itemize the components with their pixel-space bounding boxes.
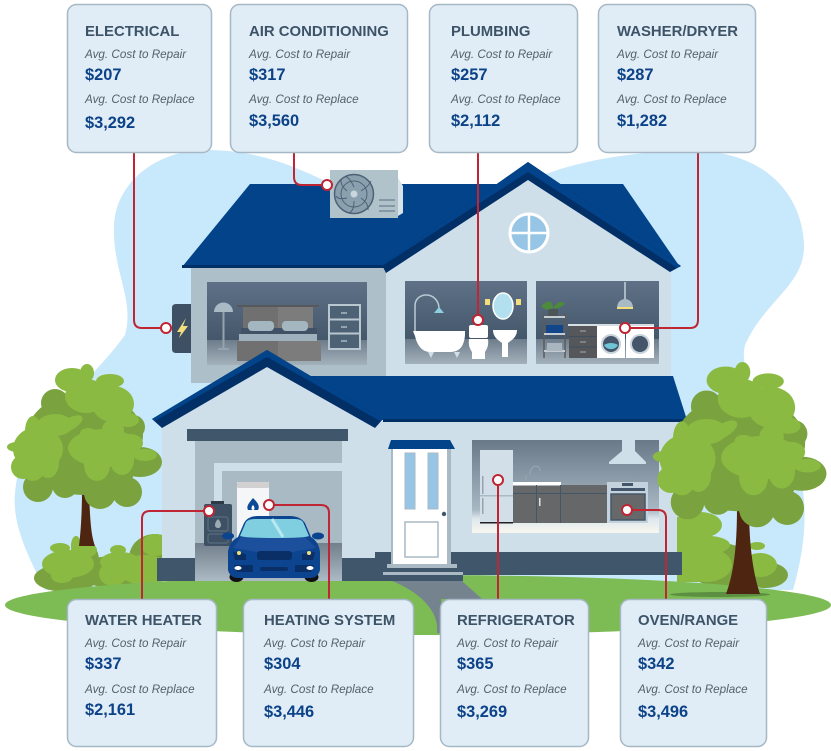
card: oven/range: Avg. Cost to Repair <box>637 637 740 650</box>
connector: air conditioning <box>294 152 332 190</box>
connector: oven/range <box>622 505 666 599</box>
garage <box>187 429 348 582</box>
back roof <box>182 184 680 268</box>
card: oven/range <box>620 600 766 746</box>
lower wall <box>162 422 677 558</box>
card: washer/dryer: Avg. Cost to Replace <box>616 93 727 106</box>
steps <box>383 564 463 581</box>
card: electrical: Avg. Cost to Replace <box>84 93 195 106</box>
card: electrical: $207 <box>85 66 121 84</box>
laundry room <box>536 281 659 364</box>
card: heating system: HEATING SYSTEM <box>264 613 395 629</box>
attic round window <box>510 214 548 252</box>
counter and drawers <box>568 324 654 358</box>
card: washer/dryer: $287 <box>617 66 653 84</box>
sink <box>493 330 517 357</box>
connector: plumbing <box>473 152 483 325</box>
right bushes <box>677 512 788 588</box>
upper gable wall <box>386 180 671 385</box>
range hood <box>609 440 646 464</box>
washer <box>597 326 625 358</box>
front door <box>383 440 463 581</box>
bathroom <box>405 281 527 364</box>
card: water heater <box>68 600 216 746</box>
water heater unit <box>204 501 232 546</box>
card: air conditioning: $3,560 <box>249 112 299 130</box>
dresser <box>329 305 360 349</box>
card: water heater: Avg. Cost to Replace <box>84 683 195 696</box>
card: oven/range: $3,496 <box>638 703 688 721</box>
card: washer/dryer: WASHER/DRYER <box>617 24 738 40</box>
dryer <box>626 326 654 358</box>
bedroom <box>207 282 367 365</box>
wall lights <box>485 299 521 305</box>
lower gable roof <box>152 350 383 428</box>
card: air conditioning <box>230 4 408 152</box>
card: heating system: $3,446 <box>264 703 314 721</box>
card: electrical: Avg. Cost to Repair <box>84 48 187 61</box>
card: air conditioning: $317 <box>249 66 285 84</box>
card: refrigerator: REFRIGERATOR <box>457 613 575 629</box>
card: heating system: Avg. Cost to Replace <box>263 683 374 696</box>
right tree <box>653 362 826 597</box>
foundation <box>157 552 682 581</box>
card: electrical: $3,292 <box>85 114 135 132</box>
refrigerator <box>480 450 513 524</box>
card: oven/range: $342 <box>638 655 674 673</box>
floor lamp <box>214 302 233 350</box>
connector: refrigerator <box>493 475 503 599</box>
shower <box>415 295 444 333</box>
walkway <box>392 581 482 633</box>
garage lintel <box>187 429 348 441</box>
gable roof <box>382 162 681 273</box>
card: heating system: Avg. Cost to Repair <box>263 637 366 650</box>
card: washer/dryer: Avg. Cost to Repair <box>616 48 719 61</box>
upper left wall <box>191 268 387 383</box>
card: air conditioning: AIR CONDITIONING <box>249 24 389 40</box>
card: plumbing: Avg. Cost to Repair <box>450 48 553 61</box>
card: refrigerator: Avg. Cost to Replace <box>456 683 567 696</box>
house <box>152 162 687 582</box>
card: air conditioning: Avg. Cost to Repair <box>248 48 351 61</box>
card: plumbing: PLUMBING <box>451 24 530 40</box>
mirror <box>493 293 513 319</box>
card: water heater: $2,161 <box>85 701 135 719</box>
card: plumbing: $2,112 <box>451 112 500 130</box>
card: electrical <box>68 4 212 152</box>
card: washer/dryer <box>598 4 756 152</box>
shelf and plant <box>541 301 565 358</box>
air conditioner unit <box>330 170 403 218</box>
card: electrical: ELECTRICAL <box>85 24 179 40</box>
lawn <box>5 575 831 635</box>
bed <box>237 305 321 361</box>
connector: washer/dryer <box>620 152 698 333</box>
card: heating system <box>244 600 414 746</box>
meter box with lightning bolt <box>172 304 191 353</box>
card: water heater: $337 <box>85 655 121 673</box>
toilet <box>469 325 488 359</box>
kitchen <box>472 440 659 533</box>
card: oven/range: Avg. Cost to Replace <box>637 683 748 696</box>
background blob <box>15 150 805 590</box>
card: refrigerator: Avg. Cost to Repair <box>456 637 559 650</box>
car <box>222 516 324 582</box>
connector: heating system <box>264 500 329 599</box>
card: refrigerator: $365 <box>457 655 493 673</box>
card: plumbing <box>430 4 578 152</box>
card: air conditioning: Avg. Cost to Replace <box>248 93 359 106</box>
connector lines and markers <box>134 152 698 599</box>
card: water heater: Avg. Cost to Repair <box>84 637 187 650</box>
furnace <box>237 482 269 540</box>
cabinets <box>513 466 607 523</box>
card: washer/dryer: $1,282 <box>617 112 667 130</box>
card: plumbing: $257 <box>451 66 487 84</box>
card: plumbing: Avg. Cost to Replace <box>450 93 561 106</box>
card: oven/range: OVEN/RANGE <box>638 613 738 629</box>
connector: water heater <box>142 506 214 599</box>
card: heating system: $304 <box>264 655 301 673</box>
lower right roof <box>300 376 687 422</box>
pendant lamp <box>617 282 633 309</box>
bathtub <box>413 331 465 358</box>
left bushes <box>34 534 181 592</box>
card: refrigerator: $3,269 <box>457 703 507 721</box>
card: refrigerator <box>440 600 588 746</box>
oven <box>607 482 648 523</box>
left tree <box>7 364 162 546</box>
card: water heater: WATER HEATER <box>85 613 202 629</box>
connector: electrical <box>134 152 171 333</box>
